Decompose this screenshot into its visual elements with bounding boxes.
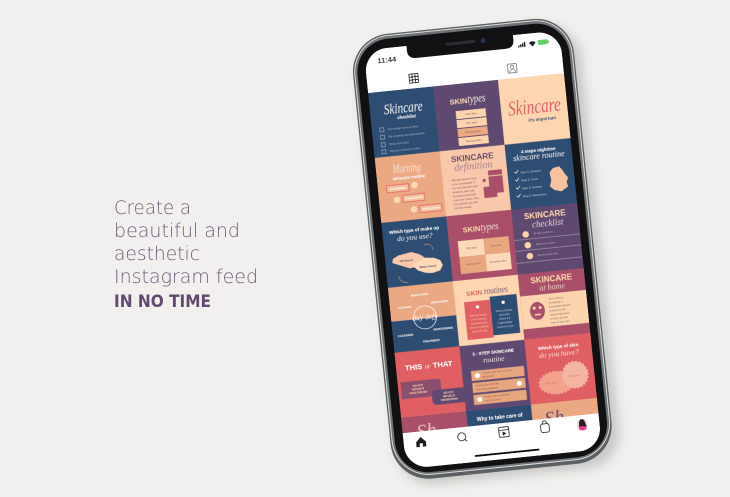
tile: skin routines: Time to cleanse — [495, 308, 513, 313]
tile: 3 step routine: Cleanse your skin to remove — [482, 369, 513, 375]
tile: skincare definition: products, start with — [453, 188, 475, 194]
tile: 3 step routine: Protect your complexion — [485, 393, 511, 399]
home indicator — [475, 449, 540, 457]
tile: skincare at home: at home — [539, 281, 566, 293]
tile: partial orange — [530, 398, 598, 420]
tile: skincare definition: SKINCARE — [451, 151, 495, 164]
tile: skincare at home: at home and use — [550, 316, 569, 321]
status and tab bar — [377, 39, 551, 86]
tile: skin types grid — [446, 210, 518, 282]
phone edge highlight — [351, 17, 614, 479]
tile: skincare it's important: Skincare — [507, 92, 562, 121]
phone mockup — [349, 14, 623, 488]
tile: skincare at home: products to find — [549, 308, 567, 313]
tile: skincare checklist — [368, 86, 440, 158]
screen — [364, 30, 602, 469]
tile: type of skin: Dry skin — [569, 373, 580, 378]
tile: this or that: or — [425, 364, 431, 371]
tile: skincare it's important — [498, 73, 571, 145]
tile: morning routine: CLEANSER — [390, 186, 406, 191]
tile: daily routine circle: MOISTURIZE — [431, 299, 448, 305]
tile: nightime routine: 4 steps nightime — [521, 146, 556, 154]
tile: why to take care: Why to take care of — [477, 413, 523, 423]
tile: 3 step routine: with sunscreen — [485, 398, 502, 403]
tile: skin types grid: Dry skin — [491, 243, 502, 248]
tile: this or that: THAT — [432, 359, 453, 370]
icon: shop bag — [540, 420, 550, 433]
tile: skin types grid: SKIN — [462, 224, 481, 235]
tile: skincare definition: Skincare doesn't have — [451, 176, 478, 182]
icon: skincare products — [482, 169, 504, 198]
icon: signal — [518, 42, 526, 48]
tile: skin types grid: Oily skin — [466, 245, 477, 250]
tile: 3 step routine: toner and moisturizer — [476, 387, 499, 392]
tile: type of skin — [524, 333, 597, 405]
tile: type of skin: Which type of skin — [538, 342, 579, 351]
notch — [406, 34, 514, 59]
icon: face mask — [529, 301, 546, 321]
tile: nightime routine: skincare routine — [513, 149, 565, 163]
tile: skin routines: and repair — [499, 313, 510, 317]
tile: nightime routine: Step 4: Moisturizer — [523, 192, 547, 198]
tile: skin routines: process of your — [497, 324, 514, 329]
tile: skincare definition: to be complicated. If — [452, 180, 476, 186]
tile: skin types grid: Sensitive skin — [489, 258, 507, 264]
tile: morning routine — [375, 151, 447, 223]
tile: skincare at home: natural ingredients — [550, 312, 571, 317]
tile: make up types: Water based — [419, 264, 437, 269]
skin blob right — [562, 361, 588, 388]
tile: skin routines: routines — [484, 285, 509, 297]
tile: this or that: DO OUT — [413, 383, 423, 388]
tile: nightime routine: Step 1: Cleanse — [520, 168, 541, 174]
phone frame — [349, 15, 615, 482]
tile: nightime routine — [505, 138, 577, 210]
icon: battery — [538, 39, 549, 45]
tile: morning routine: Morning — [391, 158, 422, 176]
tile: skin routines: so protect your — [471, 321, 487, 326]
tile: partial orange: Sh — [543, 406, 565, 430]
icon: grid tab — [409, 73, 419, 83]
tile: nightime routine: Step 3: Hydrate — [522, 184, 543, 190]
headline text: aesthetic — [114, 244, 200, 265]
tile: this or that — [394, 346, 467, 418]
tile: this or that: MOISTURIZER — [409, 390, 428, 396]
icon: search — [457, 432, 467, 442]
tile: skin types list: Oily skin — [465, 111, 477, 116]
tile: skincare checklist purple: Extra hand care — [538, 251, 559, 257]
tile: this or that: DO OUT — [443, 390, 454, 395]
tile: 3 step routine: routine — [483, 354, 506, 365]
phone shadow — [355, 21, 623, 488]
tile: this or that: WITHOUT — [443, 393, 456, 399]
tile: make up types — [381, 216, 453, 288]
tile: daily routine circle — [388, 281, 460, 354]
tile: 3 step routine: dirt and oil — [482, 375, 494, 379]
skin blob left — [539, 370, 575, 395]
tile: morning routine: SUNSCREEN — [405, 195, 423, 201]
tile: skin routines: SKIN — [466, 289, 483, 298]
tile: skin types list: types — [467, 90, 486, 106]
tile: skincare checklist: Eat a healthy and balanced diet — [388, 131, 425, 139]
phone inner rim — [352, 18, 613, 477]
tile: type of skin: do you have? — [539, 347, 580, 360]
tile: skincare definition: the products you like — [454, 200, 478, 206]
headline text: IN NO TIME — [114, 292, 211, 311]
tile: daily routine circle: TREATMENT — [423, 338, 440, 344]
tile: skincare definition: you can't find the right — [452, 184, 478, 190]
tile: skincare checklist: Drink more water — [389, 140, 409, 146]
tile: skin routines: in the morning — [471, 317, 487, 322]
tile: nightime routine: Step 2: Toner — [521, 177, 538, 182]
tile: skincare definition: the basics and build — [453, 192, 477, 198]
tile: skin routines: Start the routine — [470, 313, 488, 318]
tile: this or that: FOUNDATION — [441, 397, 458, 402]
tile: skin types grid: types — [480, 220, 499, 234]
icon: tagged tab — [507, 63, 517, 73]
tile: skincare checklist: checklist — [397, 113, 417, 120]
tile: skincare definition: for best results. — [454, 204, 472, 210]
tile: daily routine circle: day defy — [412, 311, 439, 323]
tile: skincare checklist purple: Shaved routine — [536, 240, 556, 246]
tile: skin routines: before the — [499, 317, 511, 321]
tile: skincare checklist purple — [511, 203, 584, 275]
headline text: Create a — [114, 198, 191, 219]
headline text: beautiful and — [114, 221, 240, 242]
tile: skin types grid: Normal skin — [466, 261, 481, 267]
icon: reels — [498, 427, 509, 437]
tile: skincare checklist purple: SKINCARE — [524, 208, 567, 221]
tile: skincare at home: developing a — [549, 300, 563, 305]
tile: type of skin: Oily skin — [545, 381, 557, 386]
phone bezel — [354, 21, 610, 475]
tile: make up types: Oil based — [399, 258, 413, 263]
icon: home — [416, 436, 427, 447]
status time: 11:44 — [377, 54, 397, 65]
icon: wifi — [529, 41, 536, 47]
tile: daily routine circle: CLEANSER — [398, 333, 414, 338]
tile: skincare at home: Your routine is — [548, 296, 564, 301]
tile: 3 step routine: Hydrate your skin with — [475, 382, 500, 388]
tile: daily routine circle: MOISTURIZER — [433, 326, 453, 331]
tile: partial rose: Sh — [415, 419, 438, 443]
tile: 3 step routine: 3 - STEP SKINCARE — [472, 348, 514, 357]
tile: skincare definition — [440, 145, 512, 217]
tile: morning routine: SUNSCREEN — [422, 205, 440, 211]
tile: skin types list: Dry skin — [466, 120, 478, 125]
tile: skincare definition: definition — [454, 159, 493, 174]
tile: skincare it's important: it's important — [528, 115, 557, 123]
camera — [480, 38, 486, 43]
tile: skin routines: during the day — [472, 329, 488, 334]
tile: skincare definition: your own routine. Pick — [453, 196, 480, 202]
tile: this or that: WITHOUT — [412, 387, 425, 392]
tile: skin routines — [453, 275, 525, 347]
tile: skincare at home — [518, 268, 590, 340]
tile: skincare at home: homemade skincare — [549, 303, 571, 309]
tile: skincare checklist purple: Small cushions — [533, 230, 554, 236]
tile: skin types list: Normal skin — [465, 129, 481, 134]
tile: skincare checklist: Get enough hours to sleep — [388, 124, 419, 131]
tile: skincare at home: them for your skin — [551, 320, 571, 325]
tile: daily routine circle: CLEANSE — [398, 305, 412, 310]
bottom navigation bar — [402, 413, 600, 457]
tile: daily routine circle: MOISTURIZE — [411, 292, 429, 298]
tile: morning routine: skincare routine — [392, 173, 426, 181]
screen background — [366, 32, 564, 322]
tile: skin routines: skin from pollution — [470, 325, 490, 330]
tile: skincare checklist: Skincare — [383, 99, 424, 118]
headline text — [114, 198, 258, 311]
tile: make up types: do you use? — [397, 231, 433, 243]
tile: skincare checklist purple: checklist — [532, 216, 564, 230]
tile: partial rose — [401, 411, 468, 434]
tile: skin routines: regenerating — [498, 320, 513, 325]
icon: peach blob — [549, 166, 568, 192]
headline text: Instagram feed — [114, 267, 258, 288]
avatar — [576, 419, 588, 431]
tile: 3 step routine — [459, 340, 531, 412]
tile: skincare checklist: Develop a skincare routine — [390, 146, 421, 153]
tile: skin types list: SKIN — [449, 96, 468, 107]
tile: skincare at home: SKINCARE — [530, 272, 573, 285]
tile: why to take care — [466, 404, 533, 427]
tile: skin types list: Normal skin — [466, 138, 482, 143]
tile: this or that: THIS — [405, 362, 423, 373]
speaker — [445, 40, 475, 46]
tile: make up types: Which type of make up — [389, 225, 439, 235]
tile: skin types list — [433, 80, 505, 152]
